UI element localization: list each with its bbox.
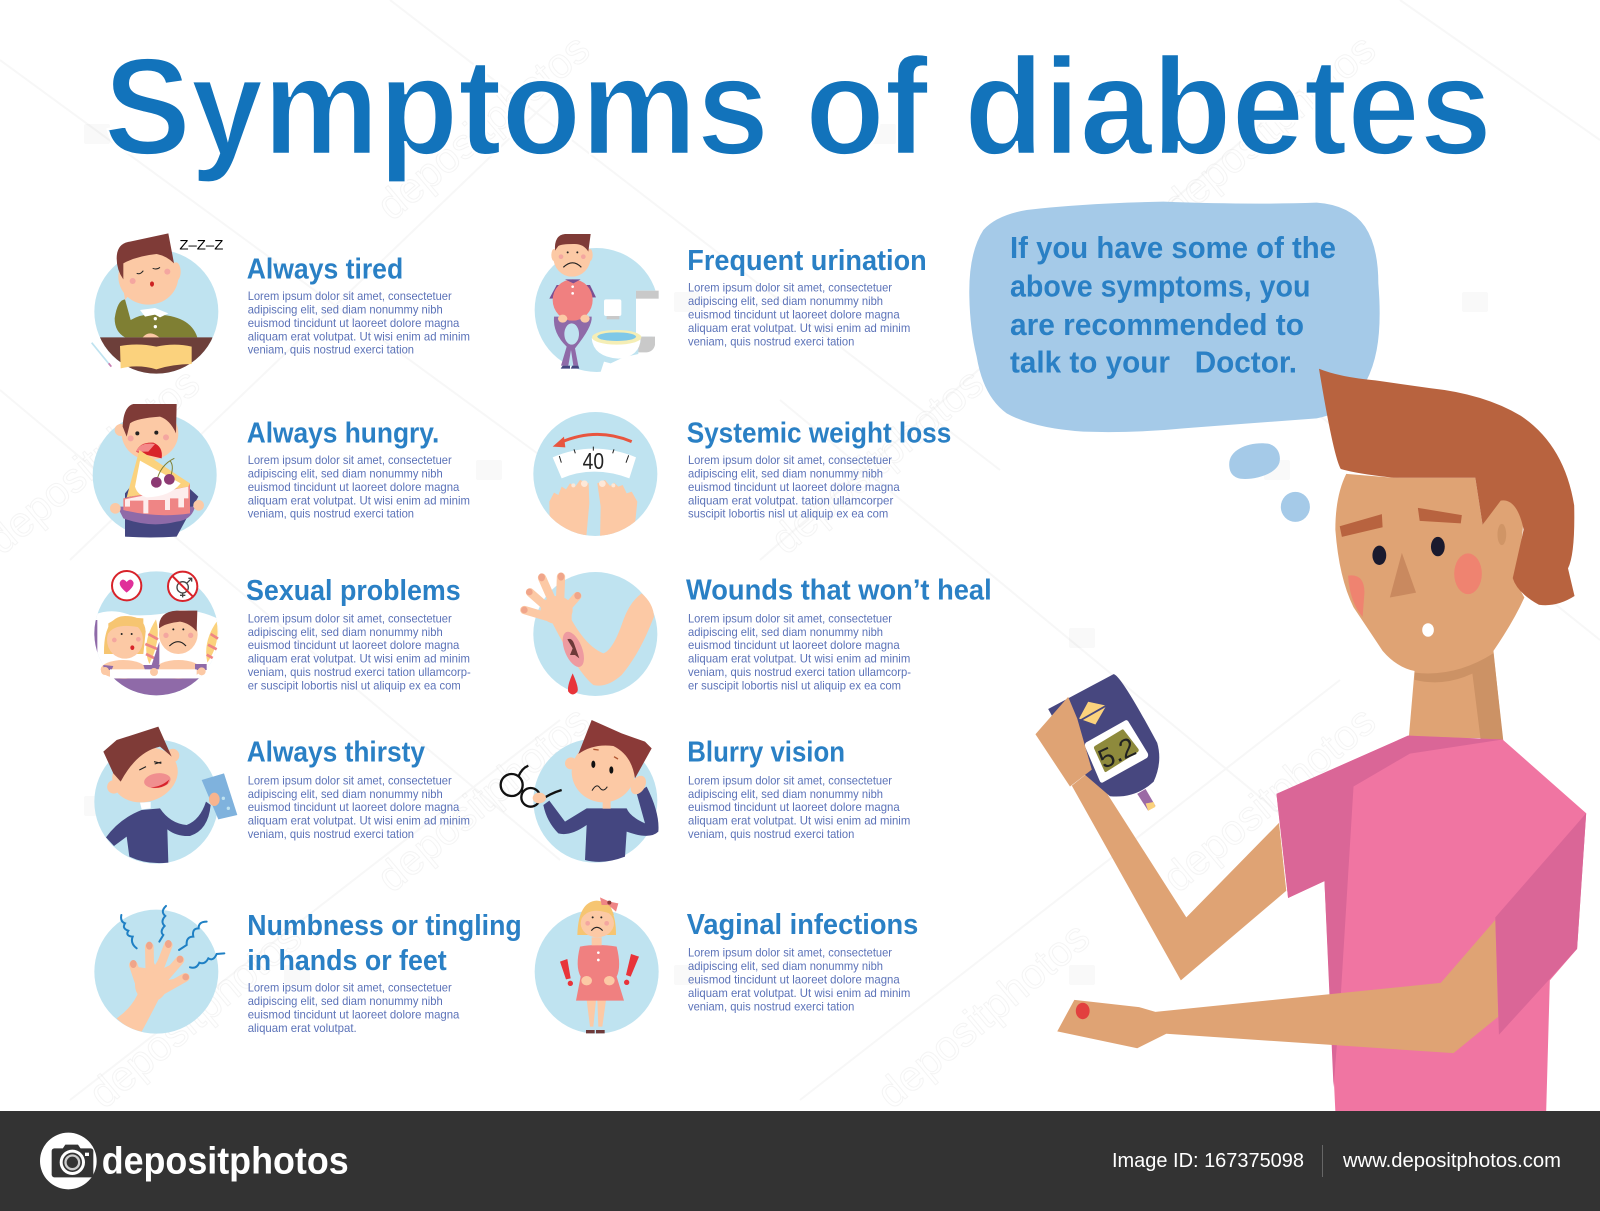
icon: man eating cake xyxy=(93,404,217,537)
neck xyxy=(1409,651,1503,740)
body text: euismod tincidunt ut laoreet dolore magna xyxy=(248,800,460,814)
body text: Lorem ipsum dolor sit amet, consectetuer xyxy=(248,453,452,467)
heading: Sexual problems xyxy=(246,575,461,607)
watermark: depositphotos xyxy=(1154,25,1384,229)
body text: aliquam erat volutpat. Ut wisi enim ad minim xyxy=(248,329,470,343)
heading: Always hungry. xyxy=(247,417,439,449)
lowered arm xyxy=(1057,920,1498,1053)
symptom: numbness xyxy=(94,906,522,1035)
no-sex sign xyxy=(168,572,197,601)
body text xyxy=(688,773,910,841)
body text xyxy=(688,946,910,1013)
no-love sign xyxy=(112,571,141,600)
speech bubble xyxy=(969,202,1380,432)
body text: veniam, quis nostrud exerci tation xyxy=(688,999,854,1013)
symptom: frequent urination xyxy=(535,234,927,377)
body text: Lorem ipsum dolor sit amet, consectetuer xyxy=(688,611,892,625)
logo icon: camera xyxy=(40,1133,97,1189)
body text: aliquam erat volutpat. Ut wisi enim ad minim xyxy=(248,652,470,666)
body text: aliquam erat volutpat. Ut wisi enim ad minim xyxy=(688,986,910,1000)
body text xyxy=(688,611,911,693)
shirt xyxy=(1276,736,1586,1111)
body text: Lorem ipsum dolor sit amet, consectetuer xyxy=(248,981,452,995)
body text: adipiscing elit, sed diam nonummy nibh xyxy=(248,787,443,801)
body text: veniam, quis nostrud exerci tation ullamcorp- xyxy=(688,665,911,679)
body text: adipiscing elit, sed diam nonummy nibh xyxy=(248,994,443,1008)
body text: Lorem ipsum dolor sit amet, consectetuer xyxy=(248,611,452,625)
body text: Lorem ipsum dolor sit amet, consectetuer xyxy=(688,281,892,295)
heading: Always thirsty xyxy=(247,737,425,769)
body text xyxy=(688,281,910,348)
body text: euismod tincidunt ut laoreet dolore magna xyxy=(688,800,900,814)
body text xyxy=(248,289,470,357)
body text: aliquam erat volutpat. Ut wisi enim ad minim xyxy=(688,814,910,828)
glucose meter xyxy=(1048,674,1159,811)
body text: aliquam erat volutpat. xyxy=(248,1021,357,1035)
watermark: depositphotos xyxy=(1154,697,1384,901)
heading: Wounds that won’t heal xyxy=(686,574,992,606)
body text xyxy=(688,453,900,521)
body text: aliquam erat volutpat. Ut wisi enim ad minim xyxy=(248,814,470,828)
body text: euismod tincidunt ut laoreet dolore magna xyxy=(688,480,900,494)
body text: veniam, quis nostrud exerci tation xyxy=(248,827,414,841)
icon: thirsty man with glass xyxy=(94,727,237,864)
icon: man with glasses xyxy=(501,720,659,863)
body text: adipiscing elit, sed diam nonummy nibh xyxy=(688,959,883,973)
blood drop on finger xyxy=(1076,1003,1090,1019)
body text: euismod tincidunt ut laoreet dolore magna xyxy=(248,638,460,652)
heading: Blurry vision xyxy=(687,737,845,769)
body text: suscipit lobortis nisl ut aliquip ex ea com xyxy=(688,507,888,521)
body text xyxy=(248,453,470,521)
footer bar xyxy=(0,1111,1600,1211)
meter reading: 5.2 xyxy=(1094,731,1140,775)
website: www.depositphotos.com xyxy=(1342,1150,1561,1172)
body text: er suscipit lobortis nisl ut aliquip ex ea com xyxy=(688,679,901,693)
bubble text: If you have some of the xyxy=(1010,230,1336,265)
symptom: always tired xyxy=(92,233,470,380)
body text: veniam, quis nostrud exerci tation ullamcorp- xyxy=(248,665,471,679)
heading xyxy=(247,910,522,977)
bubble text: are recommended to xyxy=(1010,307,1304,342)
watermark: depositphotos xyxy=(80,913,310,1117)
bubble text: above symptoms, you xyxy=(1010,269,1310,304)
bubble text: talk to your Doctor. xyxy=(1010,345,1297,380)
body text: euismod tincidunt ut laoreet dolore magna xyxy=(688,973,900,987)
heading: Vaginal infections xyxy=(687,909,918,941)
body text: euismod tincidunt ut laoreet dolore magna xyxy=(248,1008,460,1022)
symptom: always thirsty xyxy=(94,727,470,864)
title: Symptoms of diabetes xyxy=(104,30,1492,184)
body text: Lorem ipsum dolor sit amet, consectetuer xyxy=(688,946,892,960)
body text: adipiscing elit, sed diam nonummy nibh xyxy=(688,294,883,308)
icon: scale and feet xyxy=(533,412,657,540)
head xyxy=(1319,369,1575,682)
body text: veniam, quis nostrud exerci tation xyxy=(248,507,414,521)
body text: euismod tincidunt ut laoreet dolore magna xyxy=(248,316,460,330)
watermark: depositphotos xyxy=(762,359,992,563)
watermark: depositphotos xyxy=(368,697,598,901)
symptom: wounds xyxy=(521,572,992,696)
body text: Lorem ipsum dolor sit amet, consectetuer xyxy=(688,453,892,467)
body text: Lorem ipsum dolor sit amet, consectetuer xyxy=(688,773,892,787)
body text: aliquam erat volutpat. Ut wisi enim ad minim xyxy=(248,493,470,507)
body text: euismod tincidunt ut laoreet dolore magna xyxy=(688,638,900,652)
body text: adipiscing elit, sed diam nonummy nibh xyxy=(248,302,443,316)
heading: Systemic weight loss xyxy=(687,417,951,449)
body text: adipiscing elit, sed diam nonummy nibh xyxy=(688,466,883,480)
watermark xyxy=(0,25,1384,1117)
body text xyxy=(248,773,470,841)
body text: Lorem ipsum dolor sit amet, consectetuer xyxy=(248,289,452,303)
body text: aliquam erat volutpat. Ut wisi enim ad minim xyxy=(688,321,910,335)
icon: girl with exclamation marks xyxy=(535,897,659,1034)
body text: adipiscing elit, sed diam nonummy nibh xyxy=(688,787,883,801)
symptom: sexual problems xyxy=(90,571,471,698)
body text: euismod tincidunt ut laoreet dolore magna xyxy=(688,308,900,322)
heading: Frequent urination xyxy=(687,245,927,277)
symptom: always hungry xyxy=(93,404,470,537)
watermark: depositphotos xyxy=(868,913,1098,1117)
heading: Numbness or tingling xyxy=(247,910,522,942)
body text: adipiscing elit, sed diam nonummy nibh xyxy=(688,625,883,639)
raised arm xyxy=(1072,770,1286,980)
body text xyxy=(248,611,471,693)
body text: veniam, quis nostrud exerci tation xyxy=(688,827,854,841)
hand xyxy=(1035,697,1092,787)
body text: adipiscing elit, sed diam nonummy nibh xyxy=(248,466,443,480)
bubble text xyxy=(1010,230,1336,380)
icon: sleeping man xyxy=(92,233,224,380)
body text: aliquam erat volutpat. tation ullamcorper xyxy=(688,493,893,507)
symptom: blurry vision xyxy=(501,720,910,863)
thought bubbles xyxy=(1229,443,1310,522)
watermark: depositphotos xyxy=(368,25,598,229)
icon: scale and feet: 40 xyxy=(583,448,604,474)
body text: aliquam erat volutpat. Ut wisi enim ad minim xyxy=(688,652,910,666)
sleeve xyxy=(1495,813,1586,1035)
body text: er suscipit lobortis nisl ut aliquip ex ea com xyxy=(248,679,461,693)
z-z-z: Z–Z–Z xyxy=(179,236,224,252)
man with glucose meter xyxy=(1035,369,1586,1111)
image id: Image ID: 167375098 xyxy=(1112,1150,1304,1172)
icon: wounded arm xyxy=(521,572,657,696)
body text xyxy=(248,981,460,1035)
icon: tingling hand xyxy=(94,906,224,1034)
heading: in hands or feet xyxy=(247,945,447,977)
icon: couple in bed xyxy=(90,571,223,698)
symptom: vaginal infections xyxy=(535,897,918,1034)
body text: veniam, quis nostrud exerci tation xyxy=(248,343,414,357)
body text: Lorem ipsum dolor sit amet, consectetuer xyxy=(248,773,452,787)
body text: veniam, quis nostrud exerci tation xyxy=(688,334,854,348)
logo wordmark: depositphotos xyxy=(102,1140,349,1182)
heading: Always tired xyxy=(247,253,403,285)
body text: adipiscing elit, sed diam nonummy nibh xyxy=(248,625,443,639)
icon: man at toilet xyxy=(535,234,663,377)
symptom: weight loss xyxy=(533,412,951,540)
body text: euismod tincidunt ut laoreet dolore magna xyxy=(248,480,460,494)
